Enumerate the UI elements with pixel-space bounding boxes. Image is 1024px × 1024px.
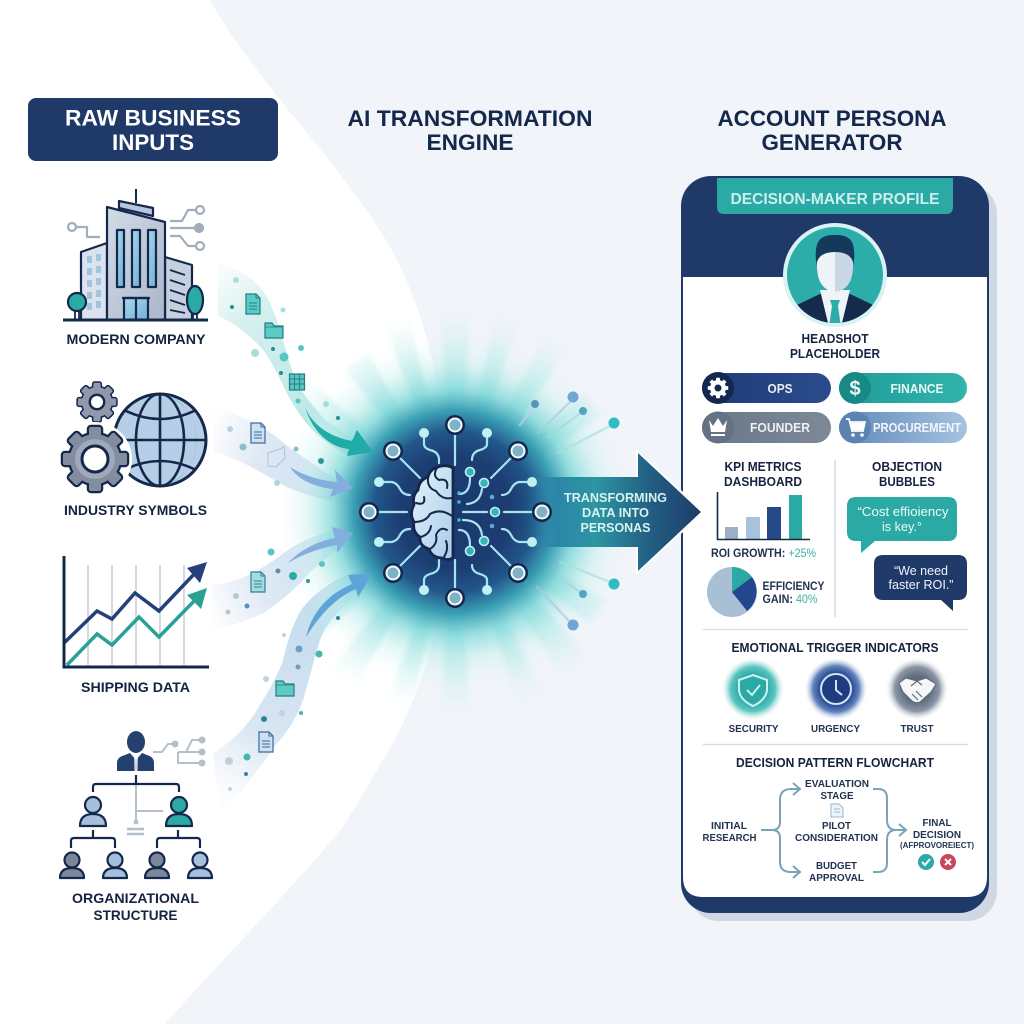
objection heading <box>872 459 942 489</box>
bubble: cost efficiency <box>847 497 957 553</box>
pill: finance: $ <box>849 378 861 400</box>
bar chart <box>718 492 810 540</box>
pill: ops <box>702 372 831 404</box>
flowchart labels: BUDGET <box>816 860 858 872</box>
output sparks <box>520 392 620 630</box>
arrow label <box>564 490 667 535</box>
pill: procurement: PROCUREMENT <box>873 421 961 435</box>
pill: procurement <box>839 412 967 444</box>
pill: ops: OPS <box>768 382 792 396</box>
efficiency gain label <box>762 581 825 606</box>
headshot label: HEADSHOT <box>802 332 869 346</box>
pill: finance <box>839 372 967 404</box>
bubble: faster roi: faster ROI.” <box>888 578 954 592</box>
ai engine radial glow <box>280 311 630 722</box>
flowchart labels: RESEARCH <box>702 832 756 844</box>
flowchart labels: EVALUATION <box>805 778 869 790</box>
label: organizational structure: STRUCTURE <box>94 907 178 923</box>
trigger labels: SECURITY <box>728 723 778 735</box>
data stream: organizational structure icons and arrow <box>225 573 373 791</box>
bubble: cost efficiency: “Cost effioiency <box>858 505 949 519</box>
ai transformation engine heading <box>348 106 592 155</box>
profile banner: DECISION-MAKER PROFILE <box>730 191 940 208</box>
roi growth label: ROI GROWTH: +25% <box>711 548 816 560</box>
decision pattern flowchart <box>702 756 974 884</box>
flowchart labels: PILOT <box>822 820 852 832</box>
chart icon: shipping data <box>64 556 209 667</box>
arrow label: TRANSFORMING <box>564 490 667 505</box>
transforming data arrow <box>525 449 705 575</box>
icon: trust handshake <box>886 658 948 720</box>
flowchart labels: INITIAL <box>711 820 748 832</box>
icon: modern company building <box>63 189 208 320</box>
neural circuit <box>359 415 552 608</box>
approve and reject icons <box>918 854 956 870</box>
account persona generator heading: GENERATOR <box>762 130 903 155</box>
data stream: shipping data icons and arrow <box>226 527 353 614</box>
kpi metrics dashboard <box>707 459 825 617</box>
account persona generator heading: ACCOUNT PERSONA <box>718 106 947 131</box>
flowchart labels <box>702 778 974 884</box>
icon: gears and globe <box>58 383 206 496</box>
bubble: cost efficiency: is key.° <box>882 520 922 534</box>
bubble: faster roi: “We need <box>894 564 948 578</box>
profile banner <box>717 178 953 214</box>
objection heading: OBJECTION <box>872 459 942 474</box>
headshot label: PLACEHOLDER <box>790 347 880 361</box>
trigger labels: URGENCY <box>811 723 860 735</box>
kpi heading <box>724 459 802 489</box>
trigger labels <box>728 723 934 735</box>
objection heading: BUBBLES <box>879 474 935 489</box>
account persona generator heading <box>718 106 947 155</box>
pie chart <box>707 567 757 617</box>
ai transformation engine heading: AI TRANSFORMATION <box>348 106 592 131</box>
data stream: modern company icons and arrow <box>230 277 373 456</box>
flowchart labels: CONSIDERATION <box>795 832 878 844</box>
pill: finance: FINANCE <box>890 382 944 396</box>
label: organizational structure <box>72 890 199 923</box>
role pills <box>702 372 967 444</box>
flowchart labels: FINAL <box>922 817 952 829</box>
arrow label: PERSONAS <box>580 520 651 535</box>
label: organizational structure: ORGANIZATIONAL <box>72 890 199 906</box>
efficiency gain label: GAIN: 40% <box>762 594 818 606</box>
kpi heading: KPI METRICS <box>724 459 802 474</box>
objection bubbles <box>835 459 967 617</box>
emotional trigger indicators <box>722 641 948 735</box>
raw business inputs header <box>28 98 278 161</box>
flowchart labels: DECISION <box>913 829 961 841</box>
flowchart document icon <box>831 804 843 817</box>
flowchart labels: STAGE <box>820 790 854 802</box>
icon: security shield <box>722 658 784 720</box>
bubble: faster roi <box>874 555 967 611</box>
icon: brain <box>412 466 453 560</box>
label: shipping data: SHIPPING DATA <box>81 679 190 695</box>
icon: urgency clock <box>805 658 867 720</box>
data stream ribbons <box>212 262 372 812</box>
icon: organizational structure <box>60 731 212 878</box>
flow arrows <box>761 783 906 878</box>
arrow label: DATA INTO <box>582 505 649 520</box>
headshot label <box>790 332 880 361</box>
label: modern company: MODERN COMPANY <box>66 331 206 347</box>
account persona card <box>681 176 997 921</box>
headshot avatar <box>783 223 887 330</box>
kpi heading: DASHBOARD <box>724 474 802 489</box>
emotional heading: EMOTIONAL TRIGGER INDICATORS <box>732 641 938 655</box>
flowchart labels: (AFPROVOREIECT) <box>900 841 974 850</box>
ai transformation engine heading: ENGINE <box>426 130 514 155</box>
raw business inputs header: INPUTS <box>112 130 194 155</box>
pill: founder <box>702 412 831 444</box>
raw business inputs header: RAW BUSINESS <box>65 106 241 130</box>
flowchart heading: DECISION PATTERN FLOWCHART <box>736 756 934 770</box>
trigger labels: TRUST <box>900 723 934 735</box>
flowchart labels: APPROVAL <box>809 872 865 884</box>
label: industry symbols: INDUSTRY SYMBOLS <box>64 502 207 518</box>
efficiency gain label: EFFICIENCY <box>762 581 825 593</box>
data stream: industry symbols icons and arrow <box>227 423 353 497</box>
pill: founder: FOUNDER <box>750 421 810 435</box>
